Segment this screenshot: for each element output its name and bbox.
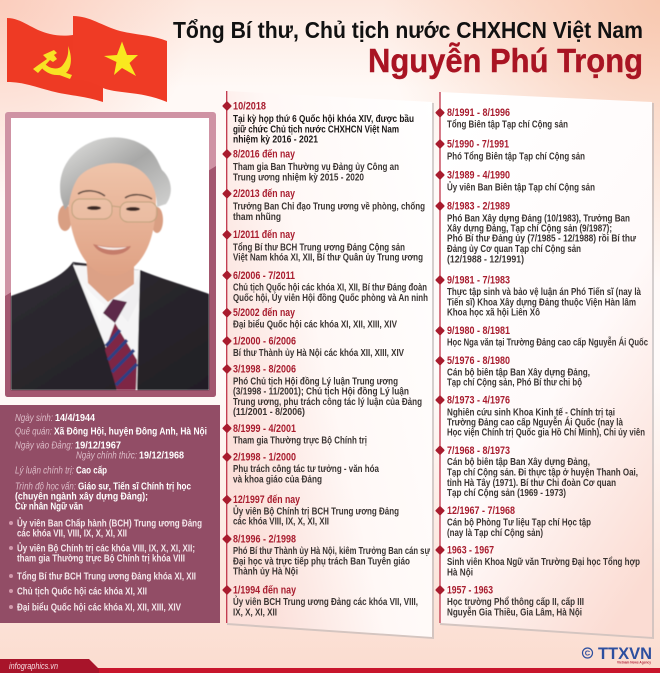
fact: education: Cử nhân Ngữ văn [15, 502, 83, 512]
entry: 8/1996 - 2/1998 [222, 534, 430, 578]
entry: 8/1996 - 2/1998: Thành ủy Hà Nội [233, 567, 298, 578]
entry: 8/1983 - 2/1989: (12/1988 - 12/1991) [447, 254, 524, 265]
entry: 8/1999 - 4/2001 [222, 423, 367, 447]
entry: 8/2016: Trung ương nhiệm kỳ 2015 - 2020 [233, 172, 364, 183]
logo: TTXVN: Vietnam News Agency [617, 660, 651, 664]
bullet: politburo: tham gia Thường trực Bộ Chính trị khóa VIII [17, 554, 185, 564]
national flag [73, 16, 167, 102]
bullet: general secretary: Tổng Bí thư BCH Trung ương Đảng khóa XI, XII [17, 570, 196, 582]
entry: 5/1976 - 8/1980: Tạp chí Cộng sản, Phó Bí thư chi bộ [447, 378, 582, 389]
entry: 7/1968 - 8/1973: tỉnh Hà Tây (1971). Bí thư Chi đoàn Cơ quan [447, 478, 616, 489]
fact: party entry date: Ngày vào Đảng: [15, 440, 73, 452]
entry: 5/1990 - 7/1991 [435, 138, 585, 162]
entry: 8/1983 - 2/1989: Đảng ủy Cơ quan Tạp chí Cộng sản [447, 244, 581, 255]
entry: 5/2002 [222, 307, 397, 330]
panel: portrait [5, 112, 216, 397]
entry: 5/1990 - 7/1991: Phó Tổng Biên tập Tạp chí Cộng sản [447, 150, 585, 162]
fact: political theory: Cao cấp [76, 464, 107, 476]
portrait hair [60, 137, 171, 210]
entry: 5/2002: Đại biểu Quốc hội các khóa XI, XII, XIII, XIV [233, 318, 397, 330]
entry: 10/2018: 10/2018 [233, 100, 266, 112]
entry: 2/2013: tham nhũng [233, 212, 281, 223]
footer bar [0, 668, 660, 673]
entry: 3/1989 - 4/1990: Ủy viên Ban Biên tập Tạp chí Cộng sản [447, 180, 595, 193]
entry: 6/2006 - 7/2011 [222, 270, 428, 304]
entry: 6/2006 - 7/2011: 6/2006 - 7/2011 [233, 270, 295, 282]
footer tab: infographics.vn: infographics.vn [9, 661, 58, 672]
entry: 12/1997: 12/1997 đến nay [233, 494, 300, 506]
bullet: central committee: các khóa VII, VIII, IX, X, XI, XII [17, 528, 127, 540]
bullet: politburo: Ủy viên Bộ Chính trị các khóa VIII, IX, X, XI, XII; [17, 542, 195, 554]
entry: 9/1980 - 8/1981: 9/1980 - 8/1981 [447, 325, 510, 337]
entry: 1/2011 [222, 229, 423, 264]
fact: political theory: Lý luận chính trị: [15, 466, 74, 476]
entry: 1/1994: IX, X, XI, XII [233, 607, 277, 618]
entry: 5/1990 - 7/1991: 5/1990 - 7/1991 [447, 138, 509, 150]
entry: 9/1980 - 8/1981 [435, 325, 648, 349]
entry: 7/1968 - 8/1973 [435, 445, 638, 499]
entry: 5/1976 - 8/1980: 5/1976 - 8/1980 [447, 355, 510, 367]
entry: 2/1998 - 1/2000: và khoa giáo của Đảng [233, 474, 322, 485]
entry: 2/1998 - 1/2000 [222, 452, 379, 485]
entry: 8/1996 - 2/1998: Đại học và trực tiếp phụ trách Ban Tuyên giáo [233, 555, 410, 567]
entry: 8/2016 [222, 148, 399, 183]
entry: 10/2018: Tại kỳ họp thứ 6 Quốc hội khóa XIV, được bầu [233, 113, 414, 125]
entry: 12/1967 - 7/1968: 12/1967 - 7/1968 [447, 505, 515, 517]
entry: 1957 - 1963: 1957 - 1963 [447, 584, 493, 596]
entry: 8/1996 - 2/1998: Phó Bí thư Thành ủy Hà Nội, kiêm Trưởng Ban cán sự [233, 546, 430, 557]
entry: 12/1997 [222, 494, 399, 528]
entry: 10/2018: giữ chức Chủ tịch nước CHXHCN Việt Nam [233, 124, 399, 135]
bullet: national assembly chair: Chủ tịch Quốc hội các khóa XI, XII [17, 586, 147, 598]
logo: TTXVN: TTXVN [598, 644, 652, 663]
entry: 1/1994 [222, 584, 418, 618]
bullet list: positions [9, 516, 202, 614]
fact: date of birth [15, 413, 95, 424]
fact: education [15, 480, 191, 512]
entry: 5/1976 - 8/1980: Cán bộ biên tập Ban Xây dựng Đảng, [447, 368, 590, 379]
fact: party entry date: 19/12/1967 [75, 440, 121, 452]
bullet: politburo [9, 542, 195, 564]
entry: 12/1967 - 7/1968 [435, 505, 591, 539]
entry: 1/2000 - 6/2006: 1/2000 - 6/2006 [233, 336, 296, 348]
entry: 8/1973 - 4/1976: 8/1973 - 4/1976 [447, 394, 510, 406]
entry: 2/2013: 2/2013 đến nay [233, 188, 295, 200]
entry: 8/1973 - 4/1976 [435, 394, 645, 439]
entry: 12/1997: các khóa VIII, IX, X, XI, XII [233, 517, 329, 528]
entry: 12/1997: Ủy viên Bộ Chính trị BCH Trung ương Đảng [233, 504, 399, 517]
entry: 9/1981 - 7/1983 [435, 274, 641, 319]
footer tab: infographics.vn [0, 659, 99, 673]
column 1 card [227, 91, 434, 639]
entry: 3/1998 - 8/2006: Phó Chủ tịch Hội đồng Lý luận Trung ương [233, 375, 398, 387]
entry: 2/1998 - 1/2000: 2/1998 - 1/2000 [233, 452, 296, 464]
entry: 1963 - 1967 [435, 544, 640, 578]
panel: timeline column 2 [435, 92, 654, 639]
entry: 8/2016: 8/2016 đến nay [233, 148, 295, 160]
bullet: central committee [9, 516, 202, 540]
entry: 6/2006 - 7/2011: Chủ tịch Quốc hội các khóa XI, XII, Bí thư Đảng đoàn [233, 282, 427, 294]
entry: 1/2000 - 6/2006 [222, 336, 404, 359]
entry: 3/1989 - 4/1990 [435, 170, 595, 193]
entry: 1/2011: Việt Nam khóa XI, XII, Bí thư Quân ủy Trung ương [233, 253, 423, 264]
entry: 12/1967 - 7/1968: (nay là Tạp chí Cộng sản) [447, 528, 543, 539]
entry: 1/2011: Tổng Bí thư BCH Trung ương Đảng Cộng sản [233, 241, 405, 253]
entry: 1957 - 1963: Học trường Phổ thông cấp II, cấp III [447, 596, 584, 608]
entry: 10/2018 [222, 100, 414, 146]
entry: 9/1981 - 7/1983: 9/1981 - 7/1983 [447, 274, 510, 286]
entry: 2/2013 [222, 188, 425, 223]
entry: 1/2000 - 6/2006: Bí thư Thành ủy Hà Nội các khóa XII, XIII, XIV [233, 348, 404, 359]
entry: 8/1991 - 8/1996 [435, 107, 568, 131]
icon: yellow star [104, 42, 138, 76]
fact: education: (chuyên ngành xây dựng Đảng); [15, 492, 148, 502]
entry: 5/1976 - 8/1980 [435, 355, 590, 389]
entry: 8/1983 - 2/1989: Xây dựng Đảng, Tạp chí Cộng sản (9/1987); [447, 223, 612, 234]
entry: 8/1999 - 4/2001: Tham gia Thường trực Bộ Chính trị [233, 436, 367, 447]
fact: hometown [15, 426, 207, 438]
entry: 2/1998 - 1/2000: Phụ trách công tác tư tưởng - văn hóa [233, 464, 379, 475]
entry: 8/1991 - 8/1996: Tổng Biên tập Tạp chí Cộng sản [447, 119, 568, 131]
entry: 8/1973 - 4/1976: Nghiên cứu sinh Khoa Kinh tế - Chính trị tại [447, 406, 615, 418]
icon: party and national flags [7, 16, 167, 102]
entry: 3/1998 - 8/2006: (11/2001 - 8/2006) [233, 407, 305, 418]
entry: 8/1991 - 8/1996: 8/1991 - 8/1996 [447, 107, 510, 119]
fact: date of birth: Ngày sinh: [15, 413, 53, 424]
entry: 7/1968 - 8/1973: Cán bộ biên tập Ban Xây dựng Đảng, [447, 457, 590, 468]
logo: TTXVN: C [585, 649, 591, 658]
bullet: central committee: Ủy viên Ban Chấp hành (BCH) Trung ương Đảng [17, 516, 202, 530]
entry: 3/1998 - 8/2006: Trung ương, phụ trách công tác lý luận của Đảng [233, 397, 422, 408]
bullet: national assembly deputy: Đại biểu Quốc hội các khóa XI, XII, XIII, XIV [17, 602, 181, 614]
entry: 3/1998 - 8/2006: 3/1998 - 8/2006 [233, 364, 296, 376]
entry: 9/1981 - 7/1983: Khoa học xã hội Liên Xô [447, 308, 540, 319]
portrait photo illustration [11, 137, 209, 390]
entry: 1/1994: 1/1994 đến nay [233, 584, 296, 596]
column 2 card [440, 92, 654, 639]
entry: 3/1998 - 8/2006: (3/1998 - 11/2001); Chủ tịch Hội đồng Lý luận [233, 386, 409, 398]
portrait glasses [72, 199, 157, 222]
entry: 8/1983 - 2/1989: 8/1983 - 2/1989 [447, 200, 510, 212]
portrait tie [103, 299, 137, 390]
entry: 2/2013: Trưởng Ban Chỉ đạo Trung ương về phòng, chống [233, 201, 425, 213]
entry: 8/2016: Tham gia Ban Thường vụ Đảng ủy Công an [233, 162, 399, 173]
fact: date of birth: 14/4/1944 [55, 413, 95, 424]
entry: 10/2018: nhiệm kỳ 2016 - 2021 [233, 135, 318, 146]
entry: 7/1968 - 8/1973: 7/1968 - 8/1973 [447, 445, 510, 457]
entry: 7/1968 - 8/1973: Tạp chí Cộng sản (1969 - 1973) [447, 488, 566, 499]
entry: 8/1983 - 2/1989 [435, 200, 637, 265]
fact: official member date: 19/12/1968 [139, 450, 184, 462]
entry: 1/1994: Ủy viên BCH Trung ương Đảng các khóa VII, VIII, [233, 595, 418, 608]
facts background [0, 405, 220, 623]
entry: 1963 - 1967: 1963 - 1967 [447, 544, 494, 556]
entry: 6/2006 - 7/2011: Quốc hội, Ủy viên Hội đồng Quốc phòng và An ninh [233, 291, 428, 304]
panel: timeline column 1 [222, 91, 434, 639]
entry: 1957 - 1963 [435, 584, 584, 618]
entry: 1957 - 1963: Nguyễn Gia Thiều, Gia Lâm, Hà Nội [447, 605, 582, 618]
name heading: Nguyễn Phú Trọng [368, 42, 643, 79]
icon: hammer and sickle [33, 46, 72, 79]
fact: party entry date [15, 440, 121, 452]
fact: education: Giáo sư, Tiến sĩ Chính trị học [78, 480, 191, 492]
entry: 5/2002: 5/2002 đến nay [233, 307, 295, 319]
fact: hometown: Quê quán: [15, 426, 52, 438]
entry: 3/1989 - 4/1990: 3/1989 - 4/1990 [447, 170, 510, 182]
entry: 3/1998 - 8/2006 [222, 364, 422, 418]
fact: hometown: Xã Đông Hội, huyện Đông Anh, Hà Nội [54, 426, 207, 438]
entry: 12/1967 - 7/1968: Cán bộ Phòng Tư liệu Tạp chí Học tập [447, 518, 591, 529]
fact: official member date: Ngày chính thức: [76, 450, 137, 462]
entry: 1963 - 1967: Hà Nội [447, 567, 473, 578]
panel: biography facts [0, 405, 220, 623]
entry: 8/1996 - 2/1998: 8/1996 - 2/1998 [233, 534, 296, 546]
portrait frame [5, 112, 216, 397]
entry: 1/2011: 1/2011 đến nay [233, 229, 295, 241]
portrait mouth [93, 244, 131, 255]
fact: education: Trình độ học vấn: [15, 482, 76, 492]
fact: official member date [76, 450, 184, 462]
portrait eyes and brows [78, 191, 152, 211]
party flag [7, 18, 103, 102]
entry: 8/1999 - 4/2001: 8/1999 - 4/2001 [233, 423, 296, 435]
